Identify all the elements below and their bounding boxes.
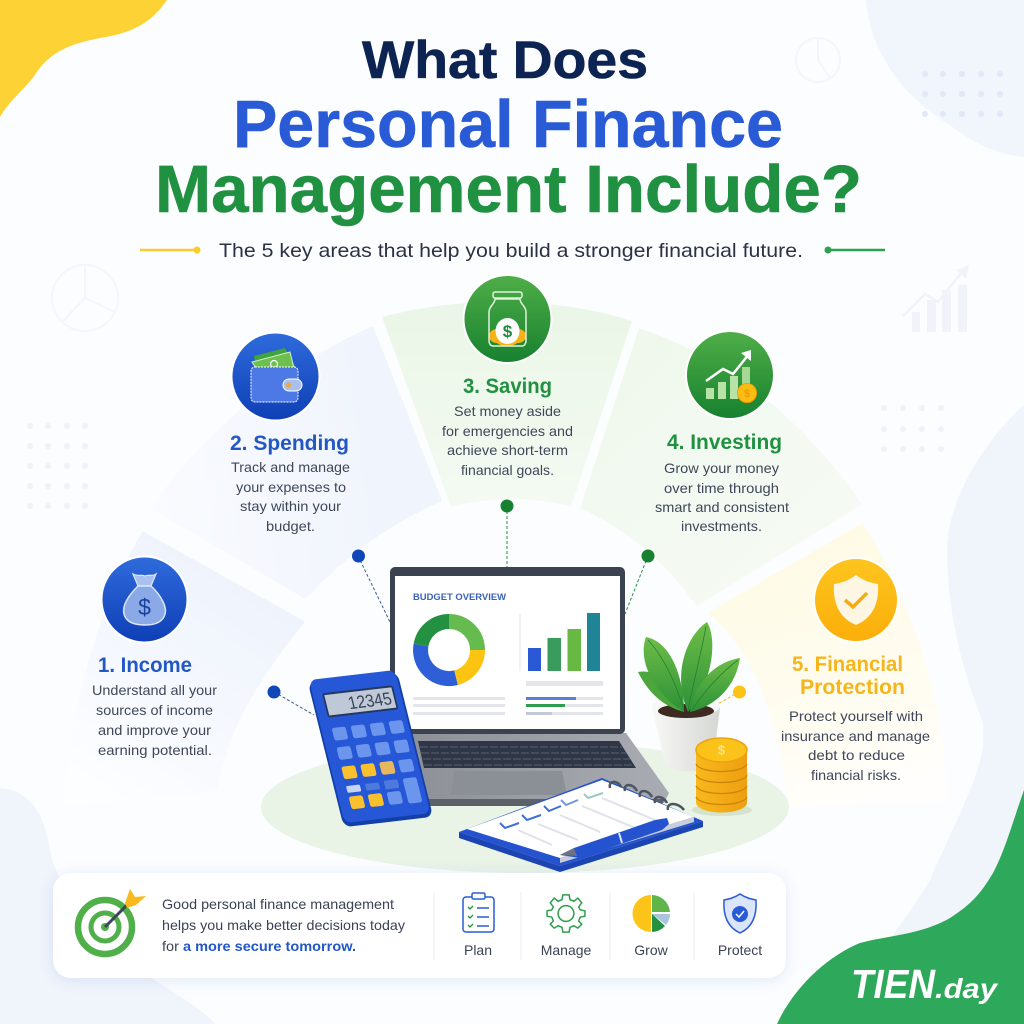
step 5: financial protection: 5. Financial [792, 653, 903, 676]
brand logo [851, 961, 999, 1007]
item: manage [541, 895, 592, 958]
step 1: income: 1. Income [98, 654, 192, 677]
summary text: for a more secure tomorrow. [162, 938, 356, 954]
step 4: investing: investments. [681, 518, 762, 534]
decorative dots top right [922, 71, 1003, 117]
item: manage: Manage [541, 942, 592, 958]
checkmarks [500, 793, 603, 828]
bar chart [520, 613, 600, 671]
calculator keys [332, 720, 422, 810]
icon: shield [814, 558, 898, 642]
step 4: investing: smart and consistent [655, 499, 789, 515]
desk ellipse [261, 741, 789, 873]
connector 4 [625, 550, 654, 614]
step 3: saving: financial goals. [461, 462, 554, 478]
step 5: financial protection: insurance and manage [781, 728, 930, 744]
plant [638, 622, 740, 771]
step 1: income: Understand all your [92, 682, 217, 698]
brand logo: TIEN [851, 961, 936, 1007]
calculator [307, 670, 433, 827]
step 1: income [92, 556, 217, 758]
laptop [338, 567, 669, 806]
blob: pale blue top right [866, 0, 1024, 157]
icon: target with dart [78, 889, 146, 954]
blob: pale blue bottom left [0, 788, 215, 1024]
step 5: financial protection: Protection [800, 676, 905, 699]
decorative faint pie left [52, 265, 118, 331]
item: grow [632, 895, 670, 958]
sector 2 background [153, 328, 440, 597]
brand logo: .day [935, 973, 999, 1004]
icon: wallet [232, 332, 320, 420]
spiral rings [610, 782, 684, 810]
sector 5 background [710, 525, 945, 805]
connector 3 [500, 500, 514, 568]
item: protect [718, 894, 762, 958]
icon: savings jar: $ [503, 322, 513, 341]
item: plan [463, 893, 494, 958]
step 5: financial protection: financial risks. [811, 767, 901, 783]
icon: growth chart [686, 331, 774, 419]
decorative dots left [27, 423, 88, 509]
icon: savings jar [464, 275, 552, 363]
step 2: spending: Track and manage [231, 459, 350, 475]
sector 1 background [65, 533, 303, 805]
donut chart [421, 622, 478, 679]
calculator: 12345 [346, 689, 394, 713]
step 4: investing: over time through [664, 480, 779, 496]
blob: pale blue right [885, 405, 1024, 1024]
blob: green bottom right [777, 790, 1024, 1024]
plant leaves [638, 671, 684, 712]
title: What Does [362, 31, 648, 90]
connector 1 [268, 686, 314, 715]
step 2: spending: budget. [266, 518, 315, 534]
step 1: income: sources of income [96, 702, 213, 718]
trackpad [451, 771, 567, 795]
decorative faint chart right [903, 265, 969, 332]
step 3: saving: 3. Saving [463, 375, 552, 398]
step 3: saving: achieve short-term [447, 442, 568, 458]
pen [560, 818, 669, 858]
step 5: financial protection [781, 558, 930, 783]
laptop screen [390, 567, 625, 734]
step 1: income: and improve your [98, 722, 211, 738]
step 3: saving: Set money aside [454, 403, 561, 419]
step 3: saving [442, 275, 573, 478]
step 4: investing: 4. Investing [667, 431, 782, 454]
title [155, 31, 862, 227]
connector 5 [714, 686, 746, 706]
summary text: helps you make better decisions today [162, 917, 405, 933]
note lines [518, 798, 655, 845]
step 3: saving: for emergencies and [442, 423, 573, 439]
icon: money bag: $ [138, 594, 151, 620]
sector 4 background [582, 330, 860, 604]
icon: growth chart: $ [744, 388, 750, 400]
step 5: financial protection: debt to reduce [808, 747, 905, 763]
step 2: spending [230, 332, 350, 534]
title: Personal Finance [233, 87, 783, 162]
summary text [162, 896, 405, 954]
notepad [459, 778, 703, 872]
decorative dots right [881, 405, 944, 452]
sector 3 background [384, 303, 630, 505]
coin stack: $ [718, 742, 726, 758]
blob: yellow top left [0, 0, 167, 117]
coin stack [692, 738, 752, 816]
step 5: financial protection: Protect yourself with [789, 708, 923, 724]
screen heading: BUDGET OVERVIEW [413, 592, 506, 603]
calculator display [322, 685, 399, 718]
bottom summary card [53, 873, 786, 978]
step 2: spending: 2. Spending [230, 432, 349, 455]
icon: money bag [102, 556, 188, 642]
title: Management Include? [155, 152, 862, 227]
item: protect: Protect [718, 942, 762, 958]
step 4: investing: Grow your money [664, 460, 779, 476]
plant pot [652, 704, 720, 771]
decorative faint pie top [796, 38, 840, 82]
summary text: Good personal finance management [162, 896, 394, 912]
subtitle: The 5 key areas that help you build a stronger financial future. [219, 240, 803, 262]
screen text rows [413, 681, 603, 715]
step 2: spending: your expenses to [236, 479, 346, 495]
item: grow: Grow [634, 942, 669, 958]
step 4: investing [655, 331, 789, 534]
dividers [434, 892, 694, 960]
item: plan: Plan [464, 942, 492, 958]
laptop base [338, 733, 669, 803]
step 1: income: earning potential. [98, 742, 212, 758]
step 2: spending: stay within your [240, 498, 341, 514]
keyboard [418, 741, 636, 768]
connector 2 [352, 550, 390, 622]
